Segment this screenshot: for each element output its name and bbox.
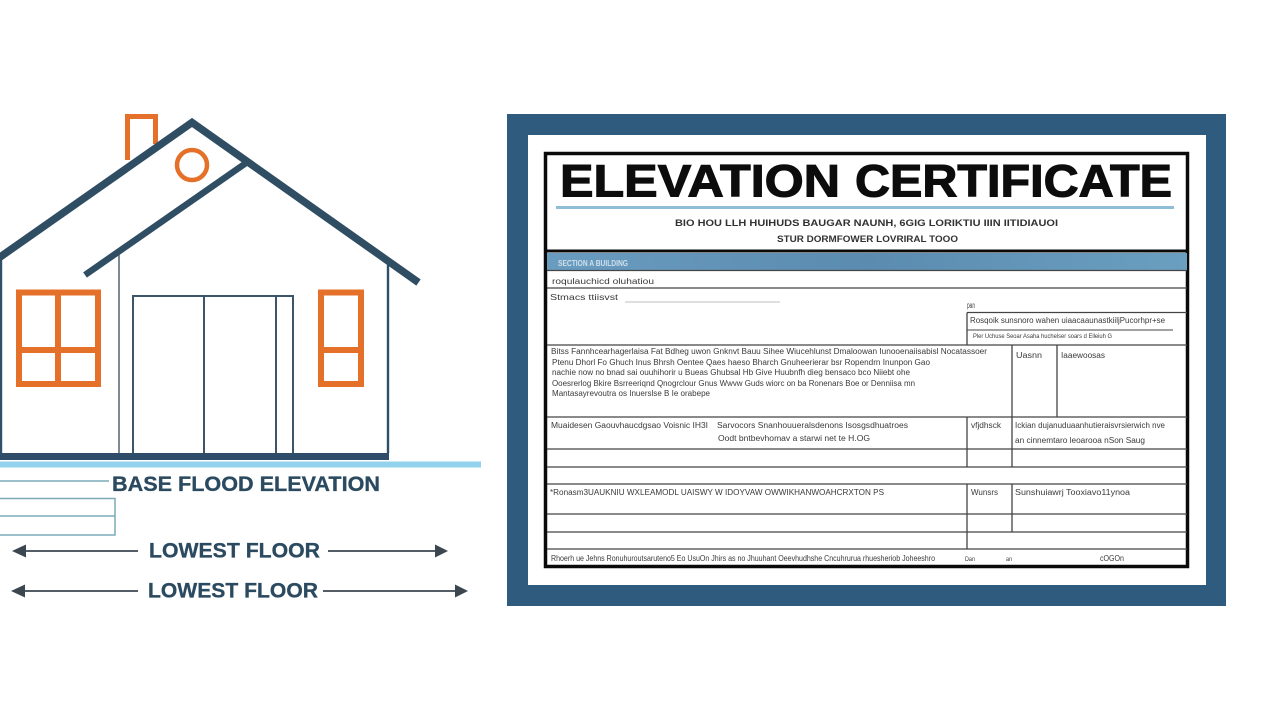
- title: ELEVATION: [560, 156, 840, 206]
- measurement row: Sarvocors Snanhouueralsdenons Isosgsdhuatroes: [717, 421, 908, 430]
- certification row: *Ronasm3UAUKNIU WXLEAMODL UAISWY W IDOYVAW OWWIKHANWOAHCRXTON PS: [550, 488, 884, 497]
- instructions paragraph: Ptenu Dhorl Fo Ghuch Inus Bhrsh Oentee Qaes haeso Bharch Gnuheerierar bsr Ropendrn Inunpon Gao: [552, 358, 931, 367]
- label: lowest floor: LOWEST FLOOR: [149, 540, 320, 562]
- instructions paragraph: nachie now no bnad sai ouuhihorir u Bueas Ghubsal Hb Give Huubnfh dieg bensaco bco Niiebt ohe: [552, 368, 911, 377]
- instructions paragraph: Mantasayrevoutra os Inuerslse B Ie orabepe: [552, 389, 711, 398]
- instructions paragraph: Uasnn: [1016, 351, 1042, 360]
- measurement row: an cinnemtaro leoarooa nSon Saug: [1015, 436, 1145, 445]
- footer row: Dan: [965, 557, 975, 563]
- right arrow: [328, 544, 448, 558]
- title: [560, 156, 1172, 206]
- attic round window: [177, 150, 207, 180]
- subtitle: BIO HOU LLH HUIHUDS BAUGAR NAUNH, 6GIG LORIKTIU IIIN IITIDIAUOI: [675, 218, 1058, 229]
- measurement row: Muaidesen Gaouvhaucdgsao Voisnic IH3I: [551, 421, 708, 430]
- label: lowest floor: LOWEST FLOOR: [148, 580, 318, 602]
- blue frame: [507, 114, 1226, 606]
- right arrow: [323, 584, 468, 598]
- instructions paragraph: [551, 347, 1105, 398]
- footer row: Rhoerh ue Jehns Ronuhuroutsaruteno5 Eo UsuOn Jhirs as no Jhuuhant Oeevhudhshe Cncuhrurua rhuesheriob Joheeshro: [551, 554, 935, 563]
- measurement row: vfjdhsck: [971, 421, 1002, 430]
- section header band: [547, 253, 1187, 270]
- lower lowest floor dimension: [11, 580, 468, 602]
- main roof: [0, 122, 418, 282]
- left arrow: [12, 544, 138, 558]
- certification row: [550, 488, 1131, 497]
- elevation certificate document: [507, 114, 1226, 606]
- certification row: Wunsrs: [971, 488, 998, 497]
- building information fields: pan: [967, 301, 975, 310]
- measurement row: [551, 421, 1166, 445]
- subtitle: STUR DORMFOWER LOVRIRAL TOOO: [777, 234, 958, 245]
- title underline: [556, 206, 1174, 209]
- building information fields: roqulauchicd oluhatiou: [552, 277, 654, 286]
- chimney: [128, 116, 156, 160]
- instructions paragraph: Ooesrerlog Bkire Bsrreeriqnd Qnogrclour Gnus Wwvw Guds wiorc on ba Ronenars Boe or Denniisa mn: [552, 379, 915, 388]
- heavy divider: [546, 250, 1187, 252]
- building information fields: Stmacs ttiisvst: [550, 293, 619, 302]
- form border: [546, 154, 1188, 566]
- certification row: Sunshuiawrj Tooxiavo11ynoa: [1015, 488, 1131, 497]
- subtitle: [675, 218, 1058, 245]
- instructions paragraph: Iaaewoosas: [1061, 351, 1105, 360]
- inner gable roof: [85, 163, 246, 275]
- house illustration: [0, 116, 481, 468]
- measurement row: Ickian dujanuduaanhutieraisvrsierwich nve: [1015, 421, 1166, 430]
- house walls: [1, 258, 388, 455]
- building information fields: Rosqoik sunsnoro wahen uiaacaaunastkiiljPucorhpr+se: [970, 316, 1166, 325]
- flood water line: [0, 462, 481, 468]
- instructions paragraph: Bitss Fannhcearhagerlaisa Fat Bdheg uwon Gnknvt Bauu Sihee Wiucehlunst Dmaloowan Iunooenaiisabisl Nocatassoer: [551, 347, 987, 356]
- porch post: [118, 255, 120, 453]
- flood level steps: [0, 481, 115, 535]
- left arrow: [11, 584, 138, 598]
- door frame: [133, 296, 293, 453]
- footer row: cOGOn: [1100, 554, 1124, 563]
- section header text: SECTION A BUILDING: [558, 259, 628, 268]
- title: CERTIFICATE: [855, 156, 1172, 206]
- foundation: [0, 453, 389, 460]
- building information fields: Pler Uchuse Seoar Asaha huchelser soars d Elleiuh G: [973, 334, 1112, 340]
- left window: [19, 292, 98, 384]
- upper lowest floor dimension: [12, 540, 448, 562]
- white mat: [528, 135, 1206, 585]
- building information fields: [550, 277, 1166, 340]
- form grid lines: [547, 270, 1187, 549]
- footer row: an: [1006, 557, 1012, 563]
- measurement row: Oodt bntbevhomav a starwi net te H.OG: [718, 434, 870, 443]
- right window: [321, 292, 361, 384]
- label: base flood elevation: BASE FLOOD ELEVATION: [112, 473, 380, 496]
